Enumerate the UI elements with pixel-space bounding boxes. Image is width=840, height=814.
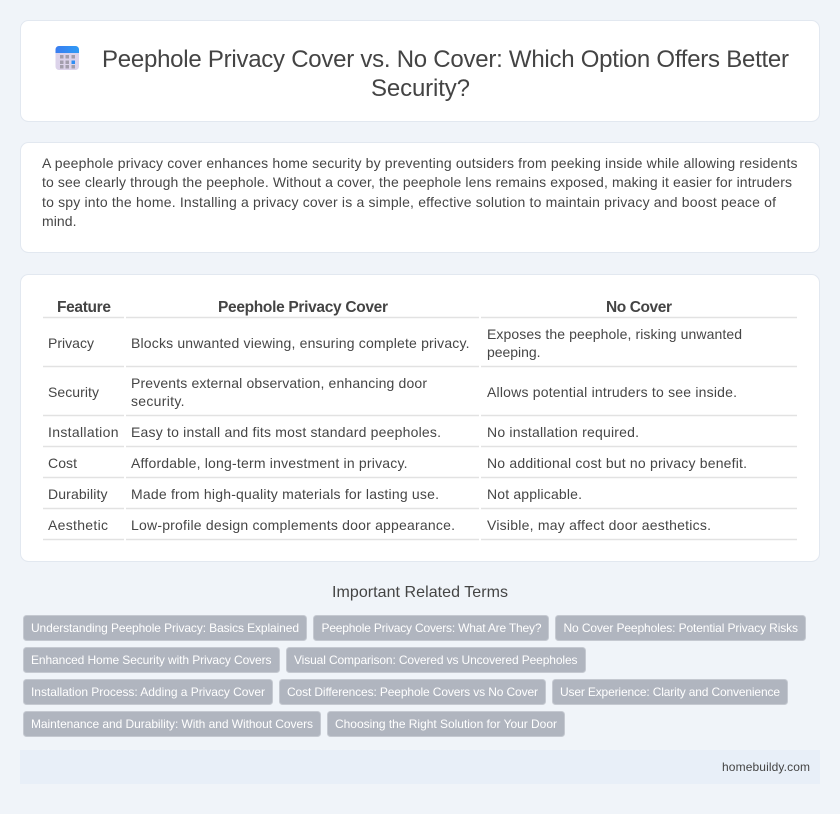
row: installation: Installation (48, 424, 118, 440)
row: aesthetic: Aesthetic (48, 517, 108, 533)
related terms tags (24, 616, 806, 736)
tag (314, 616, 548, 640)
row: aesthetic (48, 517, 711, 533)
tag (552, 680, 788, 704)
row: cost: Affordable, long-term investment in privacy. (131, 455, 408, 471)
tag (24, 712, 320, 736)
title: Peephole Privacy Cover vs. No Cover: Which Option Offers Better (102, 46, 789, 73)
panel: header (20, 20, 820, 122)
intro paragraph: to spy into the home. Installing a privacy cover is a simple, effective solution to maintain privacy and boost peace of (42, 194, 776, 210)
row: installation: Easy to install and fits most standard peepholes. (131, 424, 441, 440)
row: durability: Durability (48, 486, 108, 502)
row: privacy (48, 326, 742, 360)
tag: No Cover Peepholes: Potential Privacy Risks (564, 621, 798, 635)
tag: Cost Differences: Peephole Covers vs No Cover (287, 685, 538, 699)
intro paragraph: to see clearly through the peephole. Without a cover, the peephole lens remains exposed, making it easier for intruders (42, 174, 792, 190)
title (102, 46, 789, 102)
tag: Choosing the Right Solution for Your Door (335, 717, 557, 731)
tag (286, 648, 586, 672)
row: cost: No additional cost but no privacy benefit. (487, 455, 747, 471)
tag: User Experience: Clarity and Convenience (560, 685, 780, 699)
footer (20, 750, 820, 784)
title: Security? (371, 75, 470, 102)
table header row: No Cover (606, 299, 672, 316)
row: cost: Cost (48, 455, 77, 471)
row: security: Security (48, 384, 99, 400)
row: durability: Made from high-quality materials for lasting use. (131, 486, 439, 502)
row: security (48, 375, 737, 409)
heading: important related terms: Important Related Terms (332, 584, 508, 601)
row: security: Prevents external observation, enhancing door (131, 375, 427, 391)
table header row (57, 299, 672, 316)
tag: Peephole Privacy Covers: What Are They? (322, 621, 542, 635)
row: installation: No installation required. (487, 424, 639, 440)
table header row: Feature (57, 299, 111, 316)
row: privacy: peeping. (487, 344, 540, 360)
tag (24, 648, 280, 672)
tag: Installation Process: Adding a Privacy Cover (31, 685, 265, 699)
tag: Maintenance and Durability: With and Without Covers (31, 717, 313, 731)
intro paragraph: mind. (42, 213, 76, 229)
table header row: Peephole Privacy Cover (218, 299, 388, 316)
row: durability (48, 486, 582, 502)
tag (280, 680, 546, 704)
intro paragraph (42, 155, 798, 229)
row: aesthetic: Low-profile design complements door appearance. (131, 517, 455, 533)
row: durability: Not applicable. (487, 486, 582, 502)
row: privacy: Privacy (48, 335, 94, 351)
panel: comparison table (20, 274, 820, 562)
row: aesthetic: Visible, may affect door aesthetics. (487, 517, 711, 533)
intro paragraph: A peephole privacy cover enhances home security by preventing outsiders from peeking inside while allowing residents (42, 155, 798, 171)
row: security: Allows potential intruders to see inside. (487, 384, 737, 400)
row: privacy: Exposes the peephole, risking unwanted (487, 326, 742, 342)
tag: Visual Comparison: Covered vs Uncovered Peepholes (294, 653, 578, 667)
panel: intro text (20, 142, 820, 252)
tag: Enhanced Home Security with Privacy Covers (31, 653, 272, 667)
tag (24, 680, 272, 704)
tag (328, 712, 564, 736)
row: installation (48, 424, 639, 440)
footer: homebuildy.com (722, 760, 810, 774)
row: cost (48, 455, 747, 471)
tag: Understanding Peephole Privacy: Basics Explained (31, 621, 299, 635)
tag (24, 616, 306, 640)
tag (556, 616, 806, 640)
icon: calendar (56, 46, 79, 70)
row: security: security. (131, 393, 184, 409)
row: privacy: Blocks unwanted viewing, ensuring complete privacy. (131, 335, 470, 351)
